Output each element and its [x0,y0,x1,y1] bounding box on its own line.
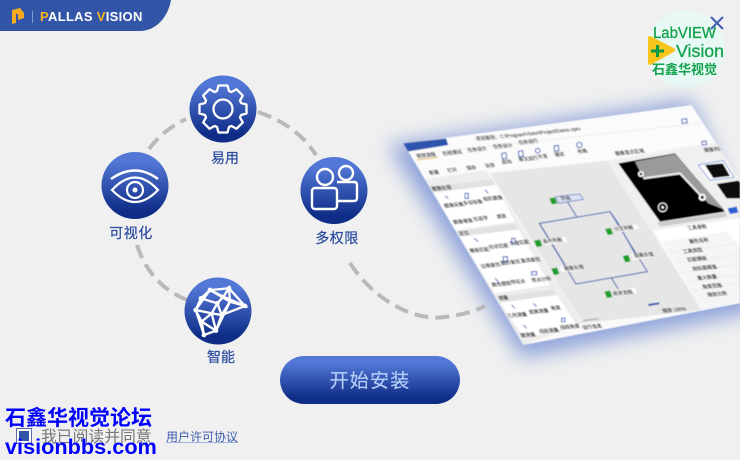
screenshot labels: 调试 [552,150,566,159]
screenshot labels: 匹配模板 [685,254,709,264]
icon: eye [111,170,158,202]
install button [280,356,460,404]
property rows [668,243,740,291]
icon: users [312,166,357,209]
zoom slider [648,303,659,305]
screenshot labels: 图像增强 [451,216,474,226]
screenshot labels: 启动 [500,157,513,166]
brand name: PALLAS VISION [40,9,143,24]
screenshot labels: 条件判断 [541,236,564,245]
screenshot labels: 缩放比例 [705,289,729,299]
screenshot labels: 距离测量 [527,306,550,316]
screenshot labels: 视觉流程 [415,150,438,160]
feature: ease of use [190,76,256,166]
screenshot labels: 相机图像 [481,193,504,203]
screenshot labels: 项目路径：C:\Program\Vision\Project\Demo.vpro [474,125,582,143]
dashed connection ring [137,112,485,318]
flow nodes [534,197,631,298]
image strip [657,213,727,227]
icon: logo [12,8,24,24]
forum URL watermark: visionbbs.com [5,434,157,459]
screenshot labels: 工具参数 [685,222,709,232]
screenshot labels: 保存 [465,163,478,172]
screenshot labels: 测量 [496,293,510,302]
screenshot labels: 定位 [457,229,471,237]
right panel [608,144,740,246]
screenshot labels: 图像列表 [702,144,725,154]
label: 智能 [207,349,235,365]
screenshot labels: 角度范围 [700,281,724,291]
screenshot labels: 布局 [575,147,589,155]
screenshot labels: 任务设计 [491,141,514,151]
screenshot labels: 开发 [536,152,549,161]
screenshot labels: 线段测量 [537,326,560,335]
screenshot labels: 属性名称 [687,236,710,245]
label: 易用 [211,150,239,166]
screenshot labels: 圆形查找 [499,257,522,267]
label: 可视化 [109,225,153,241]
screenshot labels: 边缘查找 [479,260,502,270]
canvas bottom strip [532,321,646,344]
icon: close button [711,17,723,29]
thumbnails [698,161,734,180]
screenshot labels [415,125,729,339]
install button: 开始安装 [330,370,410,392]
screenshot labels: 单次运行 [516,154,540,163]
screenshot labels: 形状匹配 [487,241,510,251]
software screenshot shadow [388,100,740,358]
screenshot labels: 新建 [427,168,441,177]
left toolbox background [425,170,583,345]
camera image grey part [635,154,724,209]
tool panel blocks [434,185,514,230]
screenshot labels: 几何测量 [505,310,529,320]
window logo tab [403,138,448,152]
screenshot labels: 角度 [549,303,562,312]
screenshot labels: 工具类型 [681,246,704,255]
feature: intelligence [184,278,252,365]
screenshot labels: 相似度阈值 [690,263,718,273]
screenshot labels: 图像采集 [442,200,465,210]
screenshot labels: 最大数量 [695,272,719,282]
screenshot labels: 线线角度 [558,322,581,331]
screenshot labels: 颜色提取 [490,279,513,289]
feature: multiple permissions [300,157,368,246]
icon: yellow triangle with plus [650,38,673,63]
forum watermark: 石鑫华视觉论坛 [5,406,152,430]
LabVIEW Vision badge: Vision [676,41,724,61]
screenshot labels: 多目标像 [461,197,484,207]
LabVIEW Vision badge: LabVIEW [653,25,716,42]
screenshot labels: 滤波 [494,212,508,220]
label: 多权限 [315,230,359,246]
screenshot labels: 图像显示区域 [613,147,646,157]
screenshot labels: 图像处理 [430,183,453,193]
screenshot labels: 任务设计 [466,144,489,154]
software screenshot [403,105,740,345]
screenshot labels: 直线查找 [519,255,542,265]
LabVIEW Vision badge [647,10,725,88]
ribbon icons [445,119,707,328]
screenshot labels: 运行信息 [580,322,604,331]
LabVIEW Vision badge: 石鑫华视觉 [652,62,717,77]
header banner [0,0,171,31]
icon: gear [200,86,246,132]
ribbon divider [429,123,702,153]
flow canvas [490,161,702,323]
screenshot labels: 结果处理 [632,250,655,260]
flowchart lines [539,202,647,289]
screenshot labels: 结束流程 [611,288,634,297]
screenshot labels: 灰度匹配 [508,238,531,247]
screenshot labels: 模板匹配 [468,245,491,255]
screenshot labels: 缩放 100% [660,305,688,315]
agreement text: 我已阅读并同意 [41,427,152,446]
screenshot labels: 图像处理 [562,263,585,272]
screenshot labels: 形态学 [472,214,490,223]
agreement checkbox [16,428,32,444]
camera image [618,153,725,222]
screenshot labels: 在线调试 [441,148,464,157]
screenshot labels: 任务运行 [516,137,540,146]
screenshot labels: 开始 [559,194,572,203]
feature: visualization [102,152,168,241]
icon: neural mesh [193,286,247,337]
screenshot labels: 另存 [483,161,497,170]
screenshot labels: 特征点 [509,277,527,286]
screenshot labels: 分支判断 [612,223,635,233]
screenshot labels: 圆测量 [519,330,537,339]
screenshot labels: 打开 [446,166,459,174]
screenshot labels: 斑点分析 [530,274,553,284]
license link: 用户许可协议 [166,429,238,444]
